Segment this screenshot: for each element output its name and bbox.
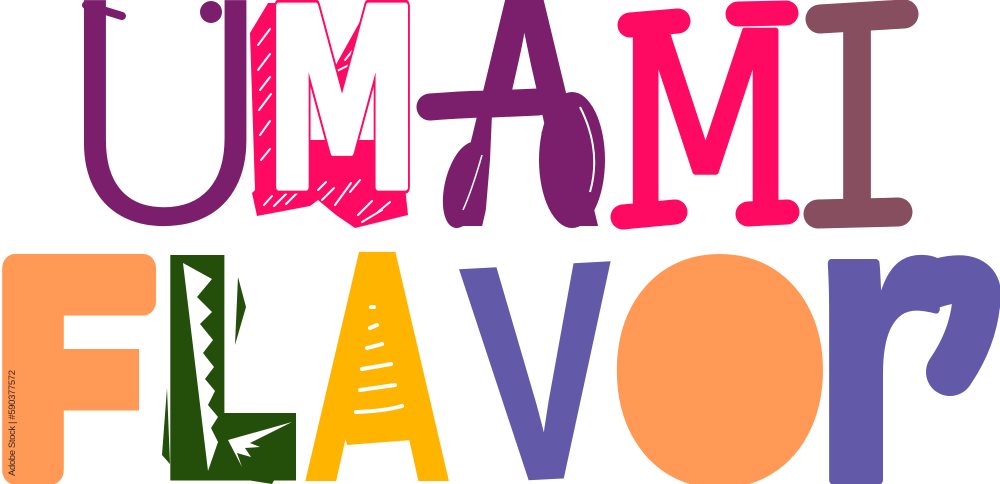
heading line: FLAVOR [0, 109, 977, 484]
heading line: UMAMI [58, 0, 904, 297]
letter O, solid orange: O [659, 274, 781, 470]
side credit text: Adobe Stock | #590377572 [7, 370, 18, 476]
